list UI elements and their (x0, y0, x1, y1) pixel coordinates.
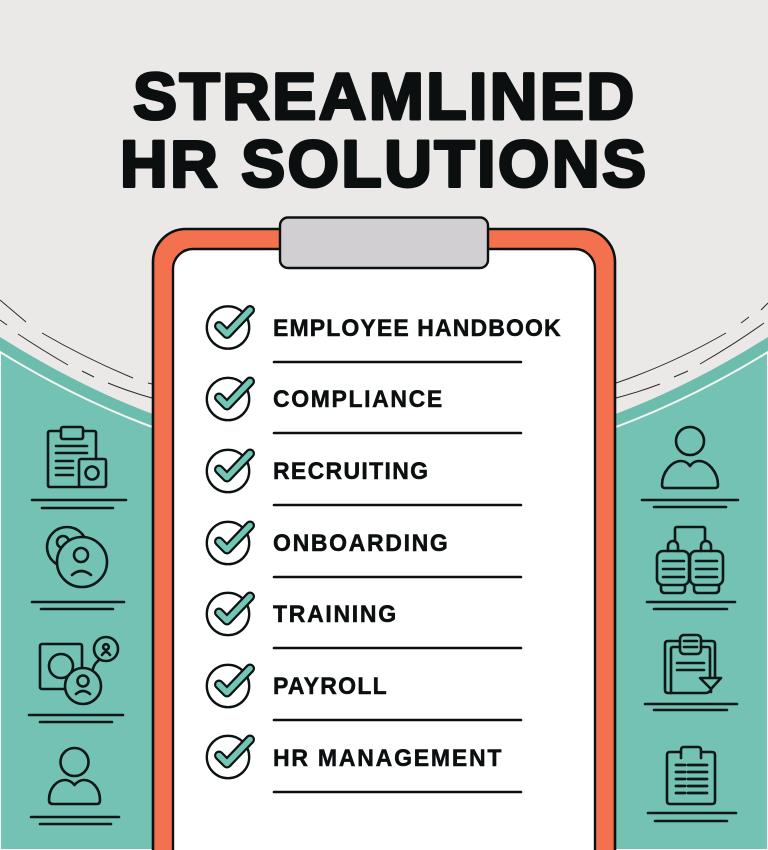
item: onboarding: ONBOARDING (273, 529, 448, 557)
clipboard clip (280, 218, 488, 268)
title (120, 59, 646, 200)
icon: person left (31, 748, 119, 824)
teal background band (0, 337, 768, 850)
teal lower field (0, 352, 768, 850)
item: payroll: PAYROLL (273, 672, 387, 700)
item: hr management (207, 736, 521, 792)
icon: connected luggage (647, 527, 735, 609)
icon: document with badge (32, 427, 126, 508)
dashed curved lines (0, 300, 768, 398)
item: hr management: HR MANAGEMENT (273, 744, 502, 772)
item: compliance (207, 378, 521, 433)
title: STREAMLINED (133, 59, 634, 133)
panel: clipboard (153, 218, 615, 850)
clipboard white sheet (173, 249, 595, 850)
title: HR SOLUTIONS (120, 126, 646, 200)
icon: clipboard with funnel (645, 635, 737, 710)
item: recruiting (207, 450, 521, 505)
clipboard orange board (153, 229, 615, 850)
icon: network of people (29, 637, 123, 722)
item: compliance: COMPLIANCE (273, 385, 442, 413)
item: onboarding (207, 522, 521, 577)
item: employee handbook (207, 306, 561, 362)
item: payroll (207, 665, 521, 720)
item: training: TRAINING (273, 600, 396, 628)
icon: checklist clipboard (648, 747, 736, 821)
item: training (207, 593, 521, 648)
icon: overlapping profile circles (32, 527, 124, 609)
icon: person right (642, 427, 738, 507)
item: recruiting: RECRUITING (273, 457, 428, 485)
item: employee handbook: EMPLOYEE HANDBOOK (273, 314, 561, 342)
